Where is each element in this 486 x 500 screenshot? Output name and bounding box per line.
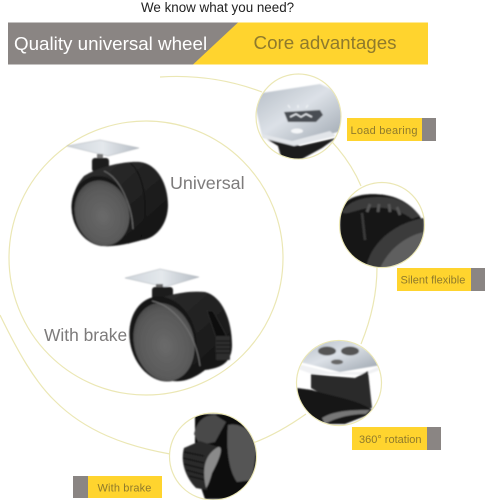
label: Load bearing: Load bearing <box>350 125 418 137</box>
detail circle: 360 rotation <box>296 340 382 426</box>
banner <box>8 22 428 64</box>
wheel: universal caster <box>63 140 168 253</box>
label: Silent flexible: Silent flexible <box>400 274 465 286</box>
wheel body <box>133 292 232 381</box>
banner right heading: Core advantages <box>254 32 397 53</box>
wheel face <box>121 289 205 389</box>
banner left heading: Quality universal wheel <box>14 33 207 54</box>
label: Load bearing <box>347 118 436 141</box>
detail circle: load bearing <box>255 74 345 160</box>
mounting plate <box>67 140 139 156</box>
brake lever <box>207 311 230 360</box>
label: With brake (tag): With brake <box>98 482 152 494</box>
mounting plate <box>125 269 199 287</box>
detail circle: silent flexible <box>340 182 424 268</box>
title: We know what you need?: We know what you need? <box>141 0 294 15</box>
stem <box>152 287 173 304</box>
stem <box>92 158 109 172</box>
wheel body <box>73 162 168 246</box>
wheel face <box>63 169 139 253</box>
label: Universal: Universal <box>170 173 245 193</box>
label: With brake (tag) <box>73 476 162 498</box>
label: 360° rotation: 360° rotation <box>359 434 422 446</box>
label: With brake: With brake <box>44 325 127 345</box>
label: 360° rotation <box>352 427 441 450</box>
inner circle <box>9 121 283 395</box>
outer arc line <box>0 76 377 454</box>
label: Silent flexible <box>397 268 485 291</box>
wheel: caster with brake <box>121 269 232 389</box>
detail circle: with brake <box>170 413 257 500</box>
